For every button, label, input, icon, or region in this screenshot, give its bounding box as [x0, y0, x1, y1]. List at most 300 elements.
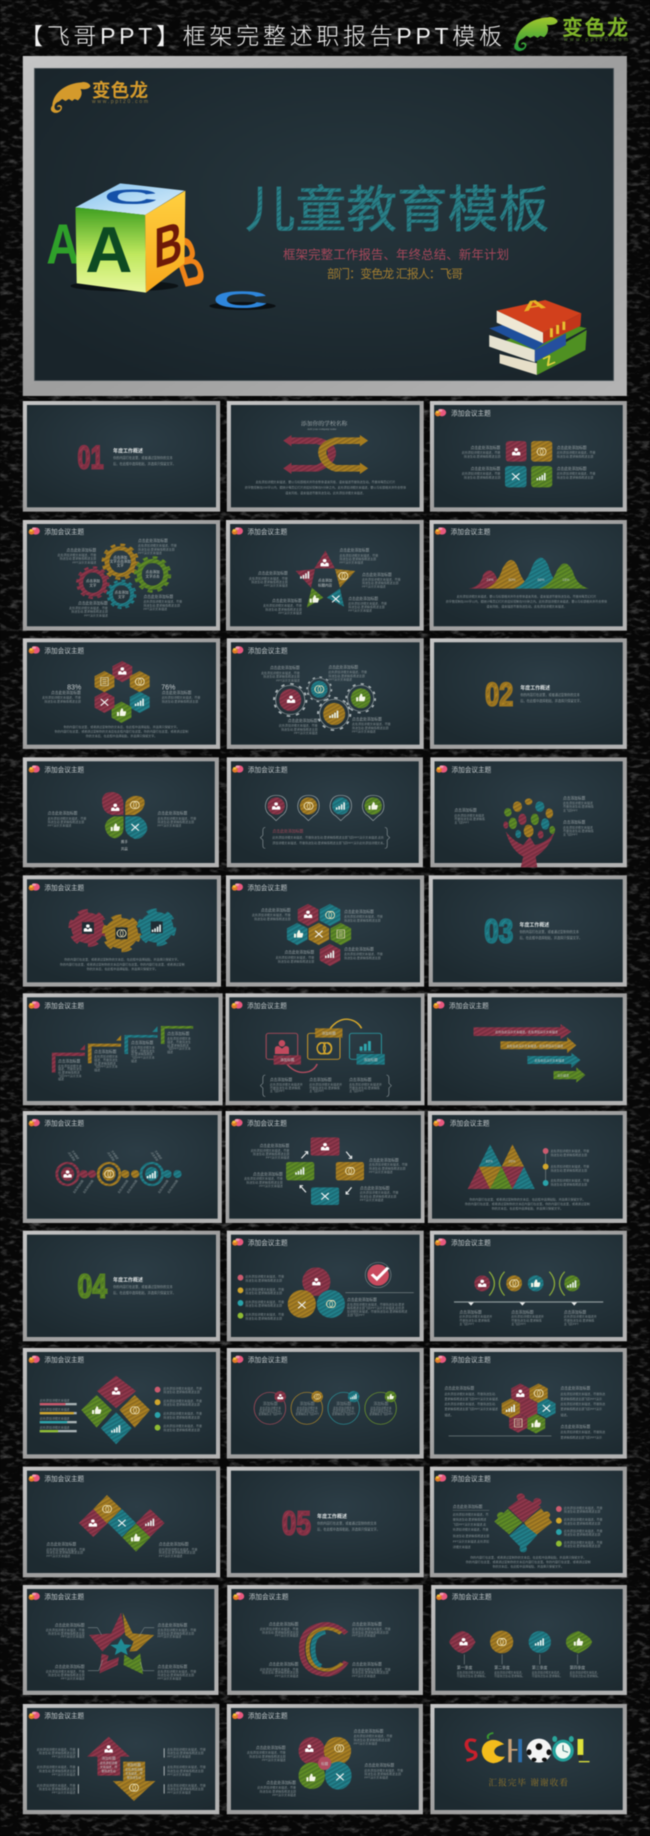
- section text: [520, 685, 583, 703]
- legend text: 简洁生动,更求精炼概述主题: [245, 1277, 282, 1282]
- text blocks right: PPT演示文本描述: [328, 677, 352, 682]
- legend text: 此处添加详细文本描述，尽量: [245, 1299, 284, 1304]
- logo and title: [29, 1118, 84, 1127]
- rings: [254, 1392, 396, 1424]
- ring text: 此处添加详细文本: [297, 1406, 318, 1410]
- leaves: [299, 1737, 352, 1790]
- text left: 简洁生动,更求精炼概述主题: [39, 1768, 75, 1773]
- text right: 更求精炼概述主题飞跃PPT演示: [561, 1434, 602, 1439]
- text blocks: 此处添加详细文本描述，尽量: [42, 695, 81, 700]
- logo and title: 添加会议主题: [451, 1238, 491, 1247]
- text right: [563, 796, 594, 837]
- text left: 点击此处添加标题: [266, 1780, 296, 1785]
- slide: cycle of four tiles: [226, 1111, 425, 1223]
- text left: [46, 1622, 85, 1680]
- text right: 简洁生动,更求精炼概述主题: [344, 955, 381, 960]
- ring badges: [274, 1391, 396, 1402]
- text left: 点击此处添加标题: [284, 950, 315, 955]
- timeline text: 主飞跃PPT: [564, 1321, 579, 1326]
- text blocks right aligned: [58, 547, 108, 617]
- hero title: 儿童教育模板: [245, 182, 549, 238]
- column text with braces: 主飞跃PPT: [349, 1088, 364, 1093]
- text right: PPT演示文本描述: [354, 1741, 377, 1746]
- section text: [317, 1513, 380, 1531]
- column text with braces: 此处添加详细文本描述并: [309, 1082, 342, 1087]
- section text: 你的内容打在这里，或者通过复制你的文本: [113, 455, 174, 460]
- text blocks right aligned: 此处添加详细文本描述，尽量: [69, 605, 108, 610]
- icon: ABC block: A: [85, 213, 132, 286]
- logo and title: 添加会议主题: [44, 1474, 84, 1483]
- body text: [465, 1196, 590, 1211]
- text left: 此处添加详细文本描述，尽量: [251, 1147, 289, 1152]
- slide: school closing: [430, 1704, 627, 1814]
- legend text: [564, 1505, 603, 1548]
- star centre label: 点击添加: [318, 577, 333, 582]
- bar labels: 此处添加详细文本描述: [40, 1425, 70, 1430]
- gold logo wordmark: 变色龙: [92, 80, 148, 101]
- text right: PPT演示文本描述: [167, 1754, 191, 1759]
- text right: 此处添加详细文本描述，尽量: [167, 1782, 206, 1787]
- stair text: 动,更求精炼概述: [167, 1042, 189, 1047]
- icon tiles: [505, 441, 552, 487]
- text right: 简洁生动,更求精炼概述主题: [167, 1750, 204, 1755]
- text block right: [162, 690, 200, 704]
- closing message: 汇报完毕 谢谢收看: [488, 1777, 568, 1788]
- text left: 此处添加详细文本描述，尽量: [252, 912, 291, 917]
- section text: 你的内容打在这里，或者通过复制你的文本: [113, 1284, 174, 1289]
- bracketed text: 点击此处添加标题: [272, 829, 304, 834]
- hero subtitle: 框架完整工作报告、年终总结、新年计划: [283, 247, 509, 262]
- text left: [48, 811, 86, 828]
- icon: ABC block: B: [163, 221, 213, 302]
- text left: [37, 1746, 78, 1795]
- section text: [113, 1277, 176, 1295]
- arrow text: 此处在此演示文本描述: [534, 1058, 564, 1063]
- petals: [102, 792, 147, 839]
- text blocks right aligned: 此处添加详细文本描述，尽量: [263, 603, 302, 608]
- text left: 点击此处添加标题: [253, 1171, 283, 1176]
- text blocks: 点击此处添加标题: [138, 538, 168, 543]
- shapes: [449, 1631, 592, 1653]
- legend text: 此处添加详细文本描述，尽量: [245, 1286, 284, 1291]
- logo and title: [436, 1592, 492, 1601]
- logo and title: 添加会议主题: [44, 1355, 84, 1364]
- text left: 此处添加详细文本描述，尽量: [244, 1176, 283, 1181]
- rotated labels: 文本描述: [70, 1150, 80, 1160]
- logo and title: [29, 527, 84, 536]
- bar labels: [40, 1398, 70, 1430]
- body text: 语言风格，语言描述尽量简洁生动。此处添加详细文本描述，: [486, 604, 567, 609]
- text block: 此处添加详细文本描述，尽量简洁生动,更求: [347, 1302, 404, 1307]
- legend text: 简洁生动,更求精炼概述主题: [163, 1414, 200, 1419]
- quarter text: 第二季度: [494, 1665, 510, 1670]
- gears: [71, 910, 174, 950]
- quarter text: [457, 1665, 600, 1678]
- body text: 的字数控制在200字以内，据统计每页幻灯片的最好控制在5分钟之内。此处添加详细文本描述，要以与标题相关并符合整体: [245, 484, 406, 489]
- text left: 点击此处添加标题: [453, 1504, 483, 1509]
- slide: chain of circles: [23, 1111, 222, 1223]
- diamonds: [81, 1376, 150, 1444]
- box labels: 添加标题: [280, 1057, 295, 1062]
- body text: [55, 724, 188, 738]
- text left: 此处添加详细文本描述，尽量: [247, 1750, 286, 1755]
- school word art: [466, 1733, 590, 1763]
- triangle mosaic: [468, 1144, 535, 1189]
- timeline text: 主飞跃PPT: [459, 1321, 474, 1326]
- circles: [474, 1272, 580, 1296]
- logo and title: [233, 1592, 289, 1601]
- text left: 简洁生动,更求精炼概述主题: [262, 1629, 299, 1634]
- logo and title: 添加会议主题: [247, 1118, 287, 1127]
- text right: PPT演示文本描述: [158, 1634, 181, 1639]
- text left: [244, 1143, 290, 1188]
- logo and title: [435, 408, 491, 417]
- hero presenter line: 部门：变色龙 汇报人：飞哥: [327, 266, 463, 281]
- text left: 点击此处添加标题: [55, 1664, 85, 1669]
- text right: 此处添加详细文本描述，尽量: [360, 1190, 399, 1195]
- text left: PPT演示文本描述: [61, 1675, 85, 1680]
- text left: 点击此处添加标题: [256, 1745, 286, 1750]
- logo and title: 添加会议主题: [248, 1355, 288, 1364]
- text blocks right aligned: 简洁生动,更求精炼概述主题: [60, 556, 96, 561]
- stair text: 此处添加详细文本: [131, 1045, 155, 1050]
- timeline: [454, 1302, 603, 1306]
- timeline text: 点击添加标题: [511, 1309, 534, 1314]
- gear labels: 点击添加: [146, 569, 160, 574]
- slide: letter C rings: [227, 1585, 423, 1695]
- text blocks right aligned: 点击此处添加标题: [66, 547, 96, 552]
- text left: 尽量简洁生动,更求精炼: [454, 816, 485, 821]
- quarter text: 此处添加详细文本描述，: [494, 1671, 524, 1675]
- percent labels: 24%: [487, 578, 494, 582]
- star centre label: 标题内容: [318, 582, 333, 587]
- ring text: 此处添加详细文本: [371, 1406, 392, 1410]
- slide: section 02: [430, 638, 627, 749]
- quarter text: 此处添加详细文本描述，: [570, 1671, 600, 1675]
- logo and title: [435, 1474, 491, 1483]
- logo and title: [433, 1001, 489, 1010]
- text left: 量简洁生动,更求精炼概述: [453, 1516, 486, 1521]
- gears: [78, 545, 170, 608]
- legend dots: [543, 1148, 549, 1186]
- timeline text: 主飞跃PPT: [511, 1321, 526, 1326]
- text blocks: 此处添加详细文本描述，尽量: [261, 670, 300, 675]
- legend text: 此处添加详细文本描述，尽量: [163, 1385, 202, 1390]
- body text: 语言风格，语言描述尽量简洁生动。此处添加详细文本描述，: [285, 490, 366, 495]
- section text: 后，在此框中选择粘贴，并选择只保留文字。: [317, 1526, 380, 1531]
- text right: 点击此处添加标题: [561, 1385, 591, 1390]
- text block: [345, 1293, 414, 1317]
- logo and title: 添加会议主题: [248, 1711, 288, 1720]
- column text with braces: [260, 1075, 391, 1097]
- body text: 你的内容打在这里，或者通过复制你的文本后，在此框中选择粘贴，并选择只保留文字。: [469, 1196, 585, 1201]
- text blocks: 此处添加详细文本描述，尽量: [143, 599, 182, 604]
- text blocks: 点击此处添加标题: [51, 690, 81, 695]
- triangle labels: 83%: [486, 1160, 493, 1164]
- icon: ABC block: [46, 183, 276, 313]
- text right: 点击添加标题: [563, 796, 586, 801]
- logo and title: 添加会议主题: [44, 1592, 84, 1601]
- section text: [519, 922, 582, 940]
- text right: PPT演示文本描述: [352, 1633, 376, 1638]
- body text: 你的文本后，在此框中选择粘贴，并选择只保留文字。: [492, 1206, 563, 1211]
- logo and title: 添加会议主题: [451, 765, 492, 774]
- arrows: [473, 1024, 585, 1083]
- slide: four petals: [23, 757, 219, 867]
- text right: 简洁生动,更求精炼概述主题: [158, 1672, 194, 1677]
- logo and title: [29, 646, 84, 655]
- hero slide panel: [23, 56, 627, 396]
- stair text: 描述: [167, 1049, 173, 1054]
- text right: PPT演示文本描述: [360, 1197, 384, 1202]
- arrow text: 此处添加详细: [100, 1760, 117, 1765]
- gear labels: 文字: [117, 563, 124, 568]
- rotated labels: 此处添加标题: [126, 1179, 139, 1194]
- stair text: 此处添加详细文本: [94, 1054, 118, 1059]
- text right: 简洁生动,更求精炼概述主题: [369, 1165, 406, 1170]
- text left: 点击添加标题: [454, 808, 477, 813]
- text right: [561, 1385, 605, 1439]
- text block: 精炼概述主题飞跃PPT演示文本描述,此处添: [347, 1305, 404, 1310]
- text left: 简洁生动,更求精炼概述主题: [39, 1750, 75, 1755]
- icon: ABC block: C: [104, 184, 158, 209]
- text right: 点击此处添加标题: [344, 909, 374, 914]
- text blocks right: 简洁生动,更求精炼概述主题: [328, 673, 365, 678]
- legend text: 简洁生动,更求精炼概述主题: [564, 1520, 600, 1525]
- body text: [446, 593, 607, 609]
- arrow text: 文本描述，尽: [125, 1771, 143, 1776]
- logo and title: 添加会议主题: [452, 1592, 492, 1601]
- text block right: 点击此处添加标题: [162, 690, 192, 695]
- slide: section 05: [227, 1467, 424, 1577]
- text left: 简洁生动,更求精炼概述主题: [48, 819, 84, 824]
- body text: 你的内容打在这里，或者通过复制你的文本后，在此框中选择粘贴，并选择只保留文字。: [63, 724, 179, 729]
- text right: 此处添加详细文本描述，尽量: [158, 1627, 196, 1632]
- timeline text: 此处添加详细文本描述并: [511, 1314, 544, 1319]
- rotated labels: 点击添加: [150, 1151, 160, 1162]
- text block right: [557, 445, 595, 480]
- column text with braces: 点击添加标题: [270, 1077, 293, 1082]
- rotated labels: 此处添加标题: [117, 1179, 130, 1194]
- text blocks right: PPT演示文本描述: [352, 729, 376, 734]
- text blocks: 点击此处添加标题: [348, 596, 378, 601]
- text blocks right aligned: 点击此处添加标题: [78, 600, 108, 605]
- slide: star: [23, 1585, 218, 1695]
- slides rows 7 to 9: [23, 1111, 627, 1459]
- body text: [60, 957, 185, 971]
- page header title: 【飞哥PPT】框架完整述职报告PPT模板: [20, 23, 502, 49]
- arrow text: 添加标题: [102, 1755, 116, 1760]
- slides rows 1 to 3: [23, 401, 627, 749]
- bar labels: 此处添加详细文本描述: [40, 1398, 70, 1403]
- legend text: 简洁生动,更求精炼概述主题: [564, 1543, 600, 1548]
- text left: 此处添加详细文本描述，尽量: [46, 1546, 85, 1551]
- logo and title: [433, 1118, 490, 1127]
- text right: 点击此处添加标题: [158, 811, 188, 816]
- arrow text: 文本描述，尽: [100, 1764, 117, 1769]
- text right: 此处添加详细文本描述，尽量: [167, 1746, 206, 1751]
- logo and title: [435, 527, 491, 536]
- slide: hexagon ring: [23, 638, 220, 749]
- timeline text: 此处添加详细文本描述并: [459, 1314, 492, 1319]
- icon: ABC block: C: [212, 287, 269, 313]
- diamonds: [79, 1495, 165, 1552]
- percent labels: 66%: [538, 578, 545, 582]
- text blocks: 此处添加详细文本描述，尽量: [348, 600, 387, 605]
- text right: PPT演示文本描述: [167, 1772, 191, 1777]
- text blocks right aligned: PPT演示文本描述: [264, 583, 288, 588]
- tiles: [286, 1137, 364, 1205]
- school name heading: 添加你的学校名称: [301, 419, 348, 427]
- text right: [354, 1729, 403, 1780]
- legend dots: [238, 1275, 243, 1319]
- legend text: 此处添加详细文本描述，尽量: [245, 1312, 284, 1317]
- text blocks: 点击此处添加标题: [340, 548, 370, 553]
- text right: PPT演示文本描述: [167, 1790, 191, 1795]
- body text: 你的文本后，在此框中选择粘贴，并选择只保留文字。: [493, 1564, 564, 1569]
- slides rows 4 to 6: [23, 757, 627, 1105]
- text right: 点击此处添加标题: [364, 1763, 395, 1768]
- body text: 此处添加详细文本描述，要以与标题相关并符合整体语言风格，语言描述尽量简洁生动。尽量将每页幻灯片: [457, 593, 596, 598]
- slide: triangle mosaic: [428, 1111, 627, 1223]
- text left: [444, 1385, 499, 1417]
- text blocks right: 简洁生动,更求精炼概述主题: [352, 725, 389, 730]
- text blocks: 点击此处添加标题: [270, 665, 300, 670]
- legend text: 简洁生动,更求精炼概述主题: [551, 1181, 587, 1186]
- text block right: 点击此处添加标题: [557, 466, 587, 471]
- text left: PPT演示文本描述: [52, 1790, 75, 1795]
- text right: [164, 1746, 206, 1795]
- ring text: 描述尽量简洁生动,: [259, 1409, 281, 1413]
- column text with braces: 尽量简洁生动,更求精炼: [349, 1085, 380, 1090]
- body text: 你的文本后，在此框中选择粘贴，并选择只保留文字。: [87, 966, 158, 971]
- gear labels: 文字: [118, 594, 125, 599]
- text block right: 点击此处添加标题: [557, 445, 587, 450]
- text left: PPT演示文本描述: [61, 1634, 85, 1639]
- logo and title: [29, 765, 84, 774]
- body text: 你的内容打在这里，或者通过复制你的文本后内容打在这里。你的内容打在这里，或者通过复制: [60, 961, 185, 966]
- text left: PPT演示文本描述: [272, 1792, 296, 1797]
- text left: 主飞跃PPT: [454, 819, 469, 824]
- legend text: 此处添加详细文本描述，尽量: [245, 1274, 284, 1279]
- logo and title: [29, 1592, 84, 1601]
- legend text: 此处添加详细文本描述，尽量: [564, 1528, 603, 1533]
- stair text: 描述: [58, 1076, 64, 1081]
- gears: [274, 677, 375, 730]
- stair text: 点击添加标题: [94, 1049, 117, 1054]
- legend text: 简洁生动,更求精炼概述主题: [564, 1532, 600, 1537]
- section text: 后，在此框中选择粘贴，并选择只保留文字。: [520, 698, 583, 703]
- percent labels: 18%: [562, 578, 569, 582]
- slide: zigzag diamonds: [23, 1467, 220, 1577]
- logo and title: [232, 646, 288, 655]
- text blocks right: 点击此处添加标题: [328, 665, 358, 670]
- legend dots: [155, 1387, 160, 1431]
- text block left: 简洁生动,更求精炼概述主题: [464, 475, 500, 480]
- text right: 简洁生动,更求精炼概述主题: [344, 918, 381, 923]
- text blocks: 此处添加详细文本描述，尽量: [362, 576, 401, 581]
- connector lines: [464, 1654, 578, 1664]
- slide: section 01: [23, 401, 220, 512]
- text blocks: [340, 548, 401, 613]
- logo and title: 添加会议主题: [451, 1474, 491, 1483]
- gear labels: 文字点击添加: [110, 559, 131, 564]
- rotated labels: 此处添加标题: [82, 1179, 95, 1194]
- section number 01: 01: [78, 438, 104, 476]
- text blocks right: 此处添加详细文本描述，尽量: [328, 669, 367, 674]
- legend text: 此处添加详细文本描述，尽量: [551, 1164, 589, 1169]
- text right: 此处添加详细文本描述，尽量: [167, 1764, 206, 1769]
- section number 02: 02: [485, 676, 513, 713]
- triangle labels: [486, 1160, 516, 1164]
- petal caption: 共赢: [121, 846, 128, 851]
- text blocks: 简洁生动,更求精炼概述主题: [44, 699, 81, 704]
- logo and title: [29, 883, 84, 892]
- text blocks: [138, 538, 182, 611]
- text left: 简洁生动,更求精炼概述主题: [278, 958, 314, 963]
- legend text: 简洁生动,更求精炼概述主题: [163, 1427, 200, 1432]
- text left: 简洁生动,更求精炼概述主题: [262, 1670, 299, 1675]
- text right: 此处添加详细文本描述，尽量: [344, 914, 383, 919]
- text right: 点击此处添加标题: [158, 1664, 188, 1669]
- legend text: 此处添加详细文本描述，尽量: [564, 1517, 603, 1522]
- logo and title: 添加会议主题: [247, 1001, 287, 1010]
- legend text: 此处添加详细文本描述，尽量: [564, 1539, 603, 1544]
- quarter text: 此处添加详细文本描述，: [457, 1671, 487, 1675]
- logo and title: 添加会议主题: [248, 765, 288, 774]
- logo and title: 添加会议主题: [449, 1001, 489, 1010]
- text block right: 简洁生动,更求精炼概述主题: [557, 475, 593, 480]
- text left: 点击此处添加标题: [55, 1622, 85, 1627]
- slide: timeline of circles: [430, 1231, 627, 1341]
- section text: 后，在此框中选择粘贴，并选择只保留文字。: [519, 935, 582, 940]
- box icons: [275, 1040, 374, 1054]
- text blocks: 简洁生动,更求精炼概述主题: [362, 580, 398, 585]
- text right: 此处添加详细文本描述，尽量: [344, 951, 383, 956]
- text right: 更求精炼概述主题飞跃PPT演示: [561, 1396, 602, 1401]
- text left: 此处添加详细文本描述，尽量: [37, 1764, 75, 1769]
- text block right: 此处添加详细文本描述，尽量: [557, 450, 595, 455]
- body text: 你的内容打在这里，或者通过复制你的文本后，在此框中选择粘贴，并选择只保留文字。: [470, 1554, 586, 1559]
- text left: PPT演示文本描述: [48, 823, 71, 828]
- text right: 点击此处添加标题: [158, 1622, 188, 1627]
- text left: PPT演示文本描述: [52, 1772, 75, 1777]
- section text: 年度工作概述: [519, 922, 549, 929]
- text blocks: 简洁生动,更求精炼概述主题: [138, 546, 175, 551]
- gear labels: 文字: [89, 582, 97, 587]
- text left: 此处添加详细文本描述，尽: [453, 1511, 488, 1516]
- logo and title: 添加会议主题: [450, 1118, 490, 1127]
- logo and title: 添加会议主题: [44, 1001, 84, 1010]
- arrow text: 添加标题: [127, 1762, 141, 1767]
- text right: 此处添加详细文本描述，尽量: [352, 1626, 391, 1631]
- text blocks: PPT演示文本描述: [348, 608, 372, 613]
- text blocks: 此处添加详细文本描述，尽量: [138, 543, 177, 548]
- text blocks right aligned: [249, 571, 302, 615]
- text left: [453, 1504, 489, 1549]
- text right: 简洁生动,更求精炼概述主题: [159, 1550, 195, 1555]
- section text: 年度工作概述: [520, 685, 550, 692]
- ring text: 更求精炼主飞跃PPT: [369, 1412, 393, 1416]
- timeline text: 尽量简洁生动,更求精炼: [511, 1317, 542, 1322]
- text block left: 点击此处添加标题: [471, 445, 501, 450]
- gear labels: 点击添加: [86, 578, 100, 583]
- rotated labels: 文本描述: [110, 1150, 120, 1160]
- stair text: 描述: [131, 1058, 137, 1063]
- text right: 此处添加详细文本描述，尽量: [159, 1546, 197, 1551]
- icon: ABC block: A: [46, 213, 80, 275]
- legend text: 简洁生动,更求精炼概述主题: [163, 1389, 200, 1394]
